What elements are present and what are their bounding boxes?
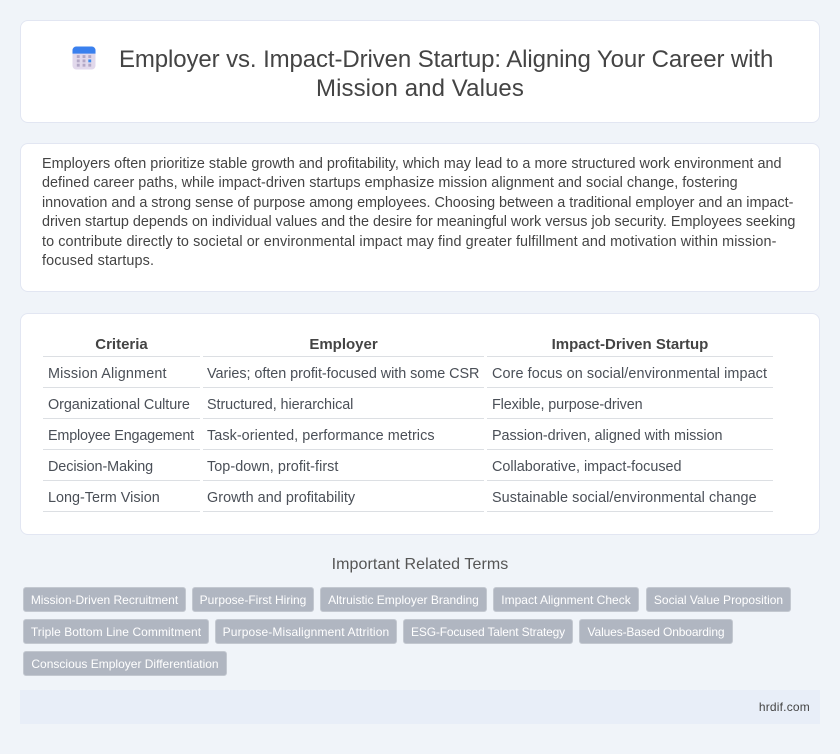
- table row: organizational culture: Structured, hierarchical: [207, 397, 353, 413]
- table row: organizational culture: [48, 397, 642, 413]
- table row: mission alignment: Mission Alignment: [48, 366, 167, 382]
- tag list: related terms: Purpose-First Hiring: [200, 593, 306, 607]
- tag list: related terms: Altruistic Employer Branding: [328, 593, 479, 607]
- panel: title header: [20, 20, 820, 123]
- tag list: related terms: ESG-Focused Talent Strategy: [411, 625, 565, 639]
- title: Mission and Values: [316, 75, 524, 102]
- text block: introduction paragraph: focused startups.: [42, 253, 154, 269]
- table row: long-term vision: Long-Term Vision: [48, 490, 160, 506]
- table row: decision-making: Decision-Making: [48, 459, 153, 475]
- table row: employee engagement: [48, 428, 723, 444]
- icon: calendar: [72, 46, 96, 70]
- text block: introduction paragraph: driven startup depends on individual values and the desire for meaningful work versus job security. Employees seeking: [42, 214, 795, 230]
- heading: important related terms: Important Related Terms: [332, 556, 508, 573]
- text block: introduction paragraph: innovation and a strong sense of purpose among employees. Choosing between a traditional employer and an impact-: [42, 195, 793, 211]
- panel: comparison table: [20, 313, 820, 535]
- table row: employee engagement: Passion-driven, aligned with mission: [492, 428, 723, 444]
- table row: mission alignment: Varies; often profit-focused with some CSR: [207, 366, 479, 382]
- panel: introduction: [20, 143, 820, 292]
- text block: introduction paragraph: [42, 156, 795, 269]
- table header row: Impact-Driven Startup: [552, 336, 708, 353]
- table header row: Employer: [309, 336, 378, 353]
- table row: organizational culture: Flexible, purpose-driven: [492, 397, 642, 413]
- text block: introduction paragraph: Employers often prioritize stable growth and profitability, which may lead to a more structured work environment and: [42, 156, 782, 172]
- table header row: [95, 336, 708, 353]
- table row: decision-making: Collaborative, impact-focused: [492, 459, 682, 475]
- footer source text: hrdif.com: [759, 700, 810, 714]
- tag list: related terms: Social Value Proposition: [654, 593, 783, 607]
- title: Employer vs. Impact-Driven Startup: Aligning Your Career with: [119, 46, 773, 73]
- footer bar: [20, 690, 820, 724]
- table row: employee engagement: Employee Engagement: [48, 428, 194, 444]
- tag list: related terms: Mission-Driven Recruitment: [31, 593, 178, 607]
- table header row: Criteria: [95, 336, 148, 353]
- table row: long-term vision: Growth and profitability: [207, 490, 355, 506]
- tag list: related terms: Impact Alignment Check: [501, 593, 631, 607]
- table row: long-term vision: Sustainable social/environmental change: [492, 490, 757, 506]
- table row: mission alignment: [48, 366, 767, 382]
- tag list: related terms: Triple Bottom Line Commitment: [31, 625, 201, 639]
- tag list: related terms: Conscious Employer Differentiation: [31, 657, 219, 671]
- table row: organizational culture: Organizational Culture: [48, 397, 190, 413]
- tag list: related terms: Purpose-Misalignment Attrition: [223, 625, 389, 639]
- table row: decision-making: Top-down, profit-first: [207, 459, 338, 475]
- tag list: related terms: Values-Based Onboarding: [588, 625, 724, 639]
- table row: mission alignment: Core focus on social/environmental impact: [492, 366, 767, 382]
- tag list: related terms: [23, 587, 791, 676]
- table row: employee engagement: Task-oriented, performance metrics: [207, 428, 435, 444]
- table row: decision-making: [48, 459, 682, 475]
- title: [119, 46, 773, 102]
- text block: introduction paragraph: defined career paths, while impact-driven startups emphasize mission alignment and social change, fostering: [42, 175, 738, 191]
- text block: introduction paragraph: to contribute directly to societal or environmental impact may find greater fulfillment and motivation within mission-: [42, 234, 776, 250]
- table row: long-term vision: [48, 490, 757, 506]
